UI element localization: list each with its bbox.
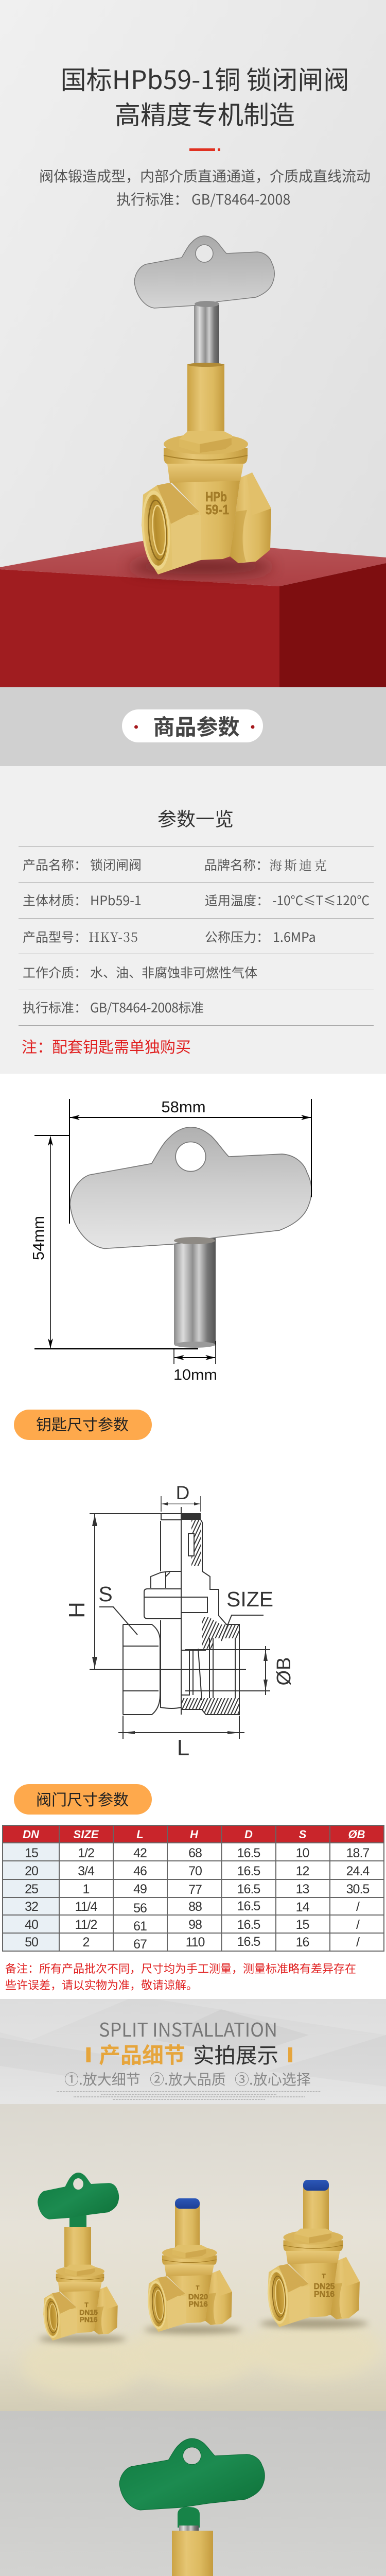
table rows: / — [356, 1900, 360, 1914]
table rows: 88 — [188, 1900, 202, 1914]
subtitle text: GB/T8464-2008 — [191, 189, 290, 209]
heading: 参数一览: 参数一览 — [157, 804, 234, 832]
valve DN20 with blue cap: PN16 — [188, 2300, 208, 2309]
sub heading: ②.放大品质 — [150, 2069, 226, 2089]
dimension: 54mm: 54mm — [29, 1216, 47, 1260]
arrows — [92, 1502, 268, 1734]
banner: product details heading — [0, 1999, 386, 2104]
table header: D — [244, 1828, 253, 1841]
table rows: / — [356, 1935, 360, 1950]
table rows: 3/4 — [78, 1864, 95, 1878]
table rows: 16.5 — [237, 1935, 260, 1949]
parameter rows: 适用温度： — [205, 891, 269, 909]
parameter rows: HKY-35 — [89, 927, 138, 946]
table rows: 16.5 — [237, 1918, 260, 1932]
valve DN25 with blue cap: T — [322, 2273, 326, 2280]
table rows: 56 — [133, 1901, 147, 1916]
table rows: 110 — [186, 1935, 205, 1950]
drawing labels — [64, 1482, 295, 1760]
table rows: 24.4 — [346, 1864, 370, 1878]
table rows: 10 — [296, 1846, 309, 1860]
green key — [119, 2438, 265, 2531]
chinese heading: 实拍展示 — [193, 2038, 278, 2069]
drawing labels: ØB — [273, 1657, 295, 1685]
panel: key dimension drawing — [0, 1074, 386, 1469]
valve DN15 with green key: T — [84, 2301, 89, 2309]
table rows: 46 — [133, 1864, 147, 1878]
title: 高精度专机制造 — [115, 95, 295, 132]
subtitle text: 执行标准： — [116, 189, 188, 209]
section view — [123, 1514, 239, 1715]
sub heading: ①.放大细节 — [64, 2069, 141, 2089]
red note: 注： — [22, 1035, 52, 1057]
hero brass valve — [139, 363, 271, 574]
table: valve dimensions — [3, 1825, 384, 1952]
centerline and leader lines — [90, 1496, 270, 1739]
sub heading: ③.放心选择 — [235, 2069, 311, 2089]
table rows — [25, 1846, 370, 1952]
panel: hero background — [0, 0, 386, 687]
table rows: 2 — [83, 1935, 90, 1950]
table rows: 15 — [296, 1918, 309, 1932]
valve DN20 with blue cap — [146, 2198, 232, 2332]
table rows: 16 — [296, 1935, 309, 1950]
table rows: 30.5 — [346, 1882, 369, 1896]
parameter rows: 产品型号： — [23, 927, 87, 946]
parameter rows: 1.6MPa — [273, 927, 316, 946]
brass valve front — [132, 2531, 254, 2576]
parameter rows: 海斯迪克 — [269, 856, 329, 874]
title: 国标HPb59-1铜 锁闭闸阀 — [61, 60, 349, 97]
table rows: 16.5 — [237, 1882, 260, 1896]
title — [61, 60, 349, 132]
red accent bar — [189, 148, 220, 151]
panel: parameter list — [0, 766, 386, 1074]
label pill: 阀门尺寸参数 — [14, 1784, 152, 1815]
drawing labels: H — [64, 1602, 90, 1618]
photo: valve front view with green key — [0, 2411, 386, 2576]
table rows: 16.5 — [237, 1864, 260, 1878]
chinese heading — [86, 2038, 292, 2070]
table header: H — [190, 1828, 199, 1841]
table rows: 13 — [296, 1882, 309, 1896]
table header: L — [136, 1828, 144, 1841]
table header: SIZE — [74, 1828, 99, 1841]
table rows: 49 — [133, 1882, 147, 1896]
table rows: 16.5 — [237, 1846, 260, 1860]
table rows: 98 — [188, 1918, 202, 1932]
remark text: 些许误差，请以实物为准，敬请谅解。 — [5, 1976, 198, 1993]
table rows: 25 — [25, 1882, 38, 1896]
panel: red display block — [0, 538, 386, 687]
parameter rows: 公称压力： — [205, 927, 269, 946]
valve DN25 with blue cap: PN16 — [314, 2290, 335, 2299]
hero brass valve: HPb — [205, 489, 227, 504]
chinese heading: 产品细节 — [99, 2038, 185, 2070]
valve DN15 with green key: DN15 — [79, 2308, 98, 2316]
label pill: 阀门尺寸参数: 阀门尺寸参数 — [36, 1787, 129, 1810]
table header: S — [299, 1828, 307, 1841]
dimension: 54mm — [29, 1136, 198, 1349]
parameter rows: 执行标准： — [23, 998, 87, 1016]
valve DN20 with blue cap: DN20 — [188, 2293, 208, 2301]
subtitle text: 阀体锻造成型，内部介质直通通道，介质成直线流动 — [39, 165, 371, 186]
icon: silver key in hero valve — [134, 236, 274, 365]
table header: ØB — [348, 1828, 365, 1841]
key illustration — [70, 1127, 311, 1348]
table rows: 12 — [296, 1864, 309, 1878]
drawing labels: L — [177, 1735, 189, 1760]
photo: three valves — [0, 2104, 386, 2411]
panel: valve technical drawing — [64, 1482, 295, 1760]
valve DN20 with blue cap: T — [196, 2285, 200, 2291]
table rows: 42 — [133, 1846, 147, 1860]
table rows: 1 — [83, 1882, 90, 1896]
parameter rows: -10°C≤T≤120°C — [272, 891, 370, 909]
table rows: 70 — [188, 1864, 202, 1878]
parameter rows — [23, 855, 370, 1016]
table rows: 11/4 — [75, 1900, 97, 1914]
table rows: 15 — [25, 1846, 38, 1860]
dimension: 10mm: 10mm — [173, 1367, 217, 1383]
drawing labels: SIZE — [226, 1587, 273, 1611]
table rows: 67 — [133, 1937, 147, 1952]
dimension: 58mm: 58mm — [161, 1098, 206, 1116]
parameter rows: 产品名称： — [23, 855, 87, 874]
valve DN15 with green key — [38, 2173, 119, 2341]
table rows: 40 — [25, 1918, 38, 1932]
table header — [23, 1828, 365, 1841]
table rows: 20 — [25, 1864, 38, 1878]
remark text: 备注：所有产品批次不同，尺寸均为手工测量，测量标准略有差异存在 — [5, 1960, 356, 1976]
valve DN25 with blue cap — [266, 2180, 360, 2327]
drawing labels: S — [98, 1582, 113, 1606]
parameter rows: HPb59-1 — [90, 891, 142, 909]
parameter rows: GB/T8464-2008标准 — [90, 998, 204, 1016]
parameter rows: 锁闭闸阀 — [90, 855, 142, 874]
subtitle text — [39, 165, 371, 209]
label pill: 钥匙尺寸参数 — [14, 1410, 152, 1440]
valve DN25 with blue cap: DN25 — [314, 2282, 335, 2291]
table header: DN — [23, 1828, 40, 1841]
section band: 商品参数: 商品参数 — [153, 710, 240, 741]
table rows: 68 — [188, 1846, 202, 1860]
hero brass valve: 59-1 — [205, 502, 229, 517]
section band: 商品参数 — [0, 687, 386, 766]
valve DN15 with green key: PN16 — [79, 2315, 98, 2324]
drawing labels: D — [176, 1482, 189, 1503]
parameter rows: 品牌名称： — [204, 855, 269, 874]
table rows: 16.5 — [237, 1899, 260, 1913]
table rows: / — [356, 1918, 360, 1932]
table rows: 32 — [25, 1900, 38, 1914]
parameter rows: 工作介质： — [23, 963, 87, 981]
table rows: 50 — [25, 1935, 38, 1950]
parameter rows: 主体材质： — [23, 891, 87, 909]
table rows: 18.7 — [346, 1846, 369, 1860]
english heading: SPLIT INSTALLATION — [99, 2014, 277, 2042]
parameter rows: 水、油、非腐蚀非可燃性气体 — [90, 963, 257, 981]
table rows: 61 — [133, 1919, 147, 1934]
label pill: 钥匙尺寸参数: 钥匙尺寸参数 — [36, 1412, 129, 1435]
table rows: 77 — [188, 1883, 202, 1897]
remark text — [5, 1960, 356, 1993]
dimension: 58mm — [69, 1098, 311, 1224]
red note: 配套钥匙需单独购买 — [52, 1035, 191, 1057]
table rows: 14 — [296, 1900, 309, 1914]
dimension: 10mm — [173, 1341, 217, 1383]
table rows: 11/2 — [75, 1918, 97, 1932]
table rows: 1/2 — [78, 1846, 94, 1860]
